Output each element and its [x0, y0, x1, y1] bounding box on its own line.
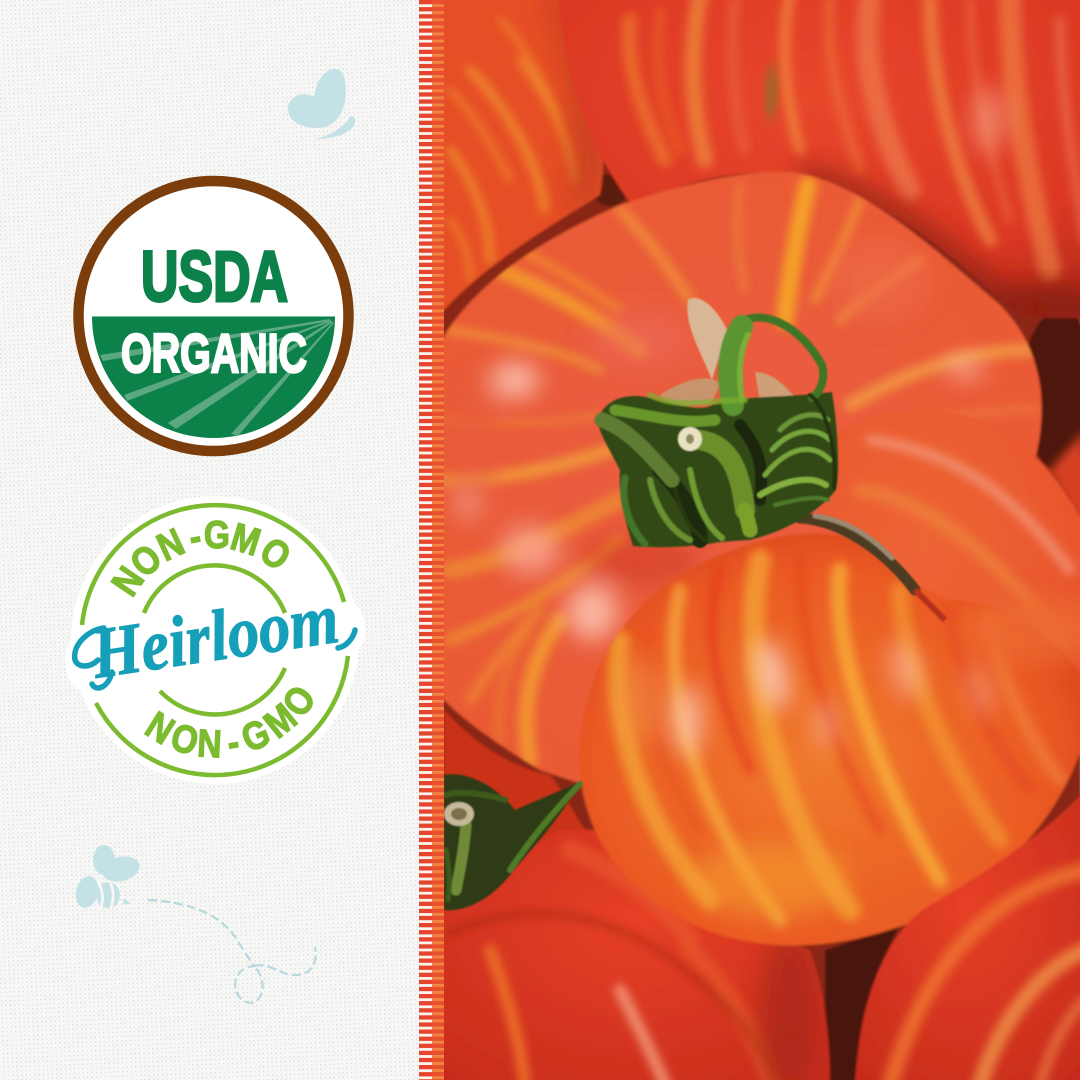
dried sepals: [687, 298, 727, 380]
text: NON-GMO bottom: -: [224, 719, 242, 765]
text: NON-GMO top: G: [203, 512, 230, 557]
text: NON-GMO bottom: M: [256, 695, 305, 746]
tomato: front: [570, 520, 1080, 960]
calyx: bottom left: [444, 774, 580, 910]
calyx loop: [729, 318, 823, 405]
stem crease: [800, 516, 945, 620]
field rays: [100, 319, 334, 436]
tomato sliver right: [1050, 430, 1080, 540]
badge: USDA Organic: [78, 181, 348, 451]
tomato layer: [431, 0, 1080, 1080]
text: NON-GMO bottom: N: [138, 703, 182, 753]
tomato: top left: [444, 0, 605, 312]
tomato: left mid behind calyx: [444, 710, 590, 920]
tomato: right lobe: [822, 411, 1080, 758]
photo: heirloom tomatoes: [431, 0, 1080, 1080]
icon: bee: [72, 845, 316, 1003]
text: NON-GMO top: N: [150, 519, 191, 570]
tomato: top right: [555, 0, 1080, 325]
text: NON-GMO bottom: [138, 677, 324, 766]
badge: Non-GMO Heirloom: [61, 496, 369, 784]
sticker backing: [61, 496, 369, 784]
text: NON-GMO top: -: [185, 514, 205, 559]
outer ring arcs: [82, 505, 348, 775]
photo shadows: [444, 160, 1080, 1011]
badge ring: [78, 181, 348, 451]
text: USDA: USDA: [141, 238, 288, 317]
tomato: bottom left: [436, 810, 836, 1080]
cut stem end: [678, 427, 702, 451]
Heirloom flourishes: [75, 628, 355, 688]
text: NON-GMO bottom: N: [196, 721, 223, 766]
icon: butterfly top: [288, 69, 355, 139]
bee flight trail: [148, 900, 316, 1003]
text: NON-GMO top: N: [103, 559, 153, 603]
ribbon edge stripes: [419, 0, 444, 1080]
calyx mass: [597, 392, 838, 547]
tomato: bottom right: [850, 785, 1080, 1080]
text: Heirloom script: Heirloom: [86, 578, 344, 694]
calyx: main stem: [597, 298, 838, 547]
text: NON-GMO bottom: G: [235, 710, 276, 761]
panel: fabric background: [0, 0, 420, 1080]
text: NON-GMO bottom: O: [273, 677, 324, 724]
calyx shadows and highlights: [602, 395, 835, 544]
text: NON-GMO top: O: [122, 535, 170, 586]
lobe and front seam blend: [960, 596, 1080, 664]
text: NON-GMO top: [103, 512, 299, 603]
text: NON-GMO bottom: O: [166, 714, 204, 764]
text: NON-GMO top: O: [252, 528, 299, 579]
tomato: main upper: [436, 160, 1056, 800]
badge green field: [92, 316, 335, 438]
text: NON-GMO top: M: [226, 514, 266, 564]
text: ORGANIC: ORGANIC: [121, 322, 307, 384]
